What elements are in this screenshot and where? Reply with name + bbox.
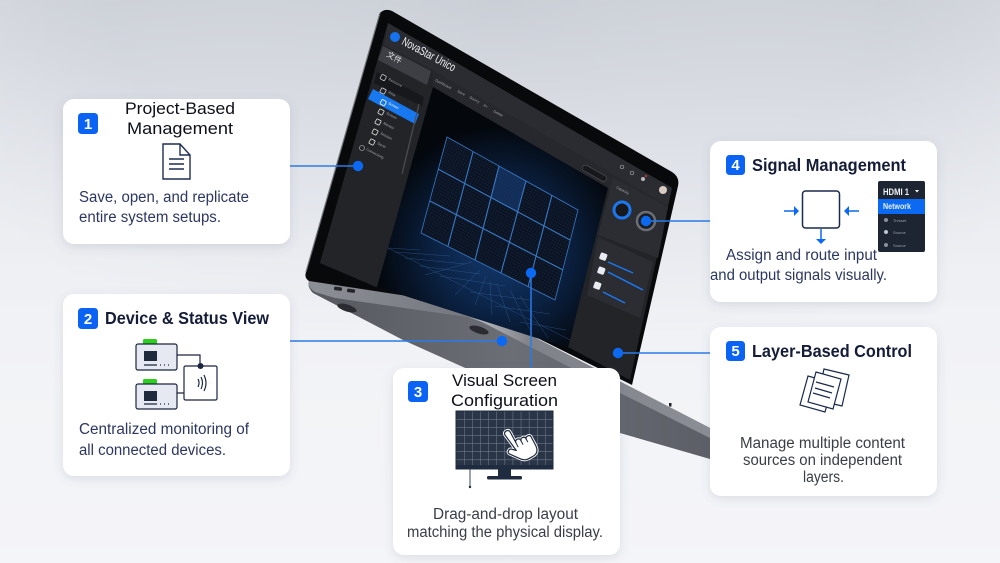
canvas floor grid <box>388 248 570 340</box>
icon: devices <box>136 339 217 409</box>
heading: Signal Management <box>752 155 906 175</box>
toolbar: Save <box>457 89 466 97</box>
LED wall grid <box>421 137 578 300</box>
panel: visual screen configuration <box>393 368 620 555</box>
toolbar: Dashboard <box>435 78 452 90</box>
icon: signal routing <box>784 191 859 244</box>
app logo <box>390 32 400 42</box>
heading <box>451 371 558 410</box>
badge 2 <box>78 308 98 329</box>
badge 4: 4 <box>731 157 740 174</box>
heading <box>125 99 235 138</box>
badge 1: 1 <box>84 116 92 133</box>
icon: document <box>163 144 190 179</box>
toolbar <box>432 70 668 222</box>
sidebar: Resource <box>388 77 403 88</box>
dropdown menu: Tresset <box>893 218 907 223</box>
laptop <box>305 10 710 459</box>
laptop lid and screen <box>305 10 678 385</box>
icon: layers <box>800 369 849 412</box>
laptop base <box>308 281 710 459</box>
badge 4 <box>726 155 745 175</box>
description: Save, open, and replicate <box>79 189 249 206</box>
heading: Layer-Based Control <box>752 341 912 361</box>
right panel: timeline <box>587 237 653 318</box>
toolbar: Delete <box>493 109 504 118</box>
panel: project-based management <box>63 99 290 244</box>
heading: Project-Based <box>125 99 235 118</box>
sidebar: Session <box>380 131 393 141</box>
description <box>407 506 603 541</box>
description <box>710 247 887 284</box>
description: Manage multiple content <box>740 435 906 452</box>
description: and output signals visually. <box>710 267 887 284</box>
badge 2: 2 <box>84 311 92 328</box>
dropdown menu <box>878 181 925 252</box>
app name: NovaStar Unico <box>400 34 458 74</box>
sidebar: Screen <box>388 101 399 110</box>
description <box>740 435 906 486</box>
description: matching the physical display. <box>407 524 603 541</box>
badge 5: 5 <box>731 343 740 360</box>
sidebar: Monitor <box>383 121 396 131</box>
description: Assign and route input <box>726 247 878 264</box>
sidebar: Saver <box>377 141 387 150</box>
heading: Management <box>127 119 233 138</box>
panel: device and status view <box>63 294 290 476</box>
badge 3: 3 <box>414 384 422 401</box>
description: Centralized monitoring of <box>79 421 250 438</box>
title bar <box>384 23 672 206</box>
heading: Configuration <box>451 391 558 410</box>
right panel: capacity <box>598 178 668 258</box>
dropdown menu: Source <box>893 243 906 248</box>
description: Drag-and-drop layout <box>433 506 579 523</box>
description <box>79 421 250 459</box>
description: entire system setups. <box>79 209 221 226</box>
description <box>79 189 249 226</box>
toolbar: A+ <box>483 103 488 109</box>
sidebar: 文件 <box>385 49 404 66</box>
badge 3 <box>408 381 428 402</box>
connector lines <box>290 161 710 368</box>
badge 5 <box>726 341 745 361</box>
sidebar <box>320 45 432 287</box>
panel: signal management <box>710 141 937 302</box>
panel: layer-based control <box>710 327 937 496</box>
sidebar: Screen <box>386 111 397 120</box>
badge 1 <box>78 113 98 134</box>
description: sources on independent <box>743 452 903 469</box>
toolbar: Sourcy <box>469 95 480 104</box>
right panel: capacity: Capacity <box>616 185 630 196</box>
dropdown menu: HDMI 1 <box>883 187 910 198</box>
canvas <box>377 87 608 348</box>
sidebar: Area <box>388 90 396 97</box>
description: layers. <box>803 469 844 486</box>
description: all connected devices. <box>79 442 226 459</box>
dropdown menu: Source <box>893 230 906 235</box>
heading: Device & Status View <box>105 308 269 328</box>
icon: monitor with hand <box>456 411 553 488</box>
sidebar: Connectivity <box>366 147 385 160</box>
dropdown menu: Network <box>883 201 911 211</box>
heading: Visual Screen <box>452 371 557 390</box>
